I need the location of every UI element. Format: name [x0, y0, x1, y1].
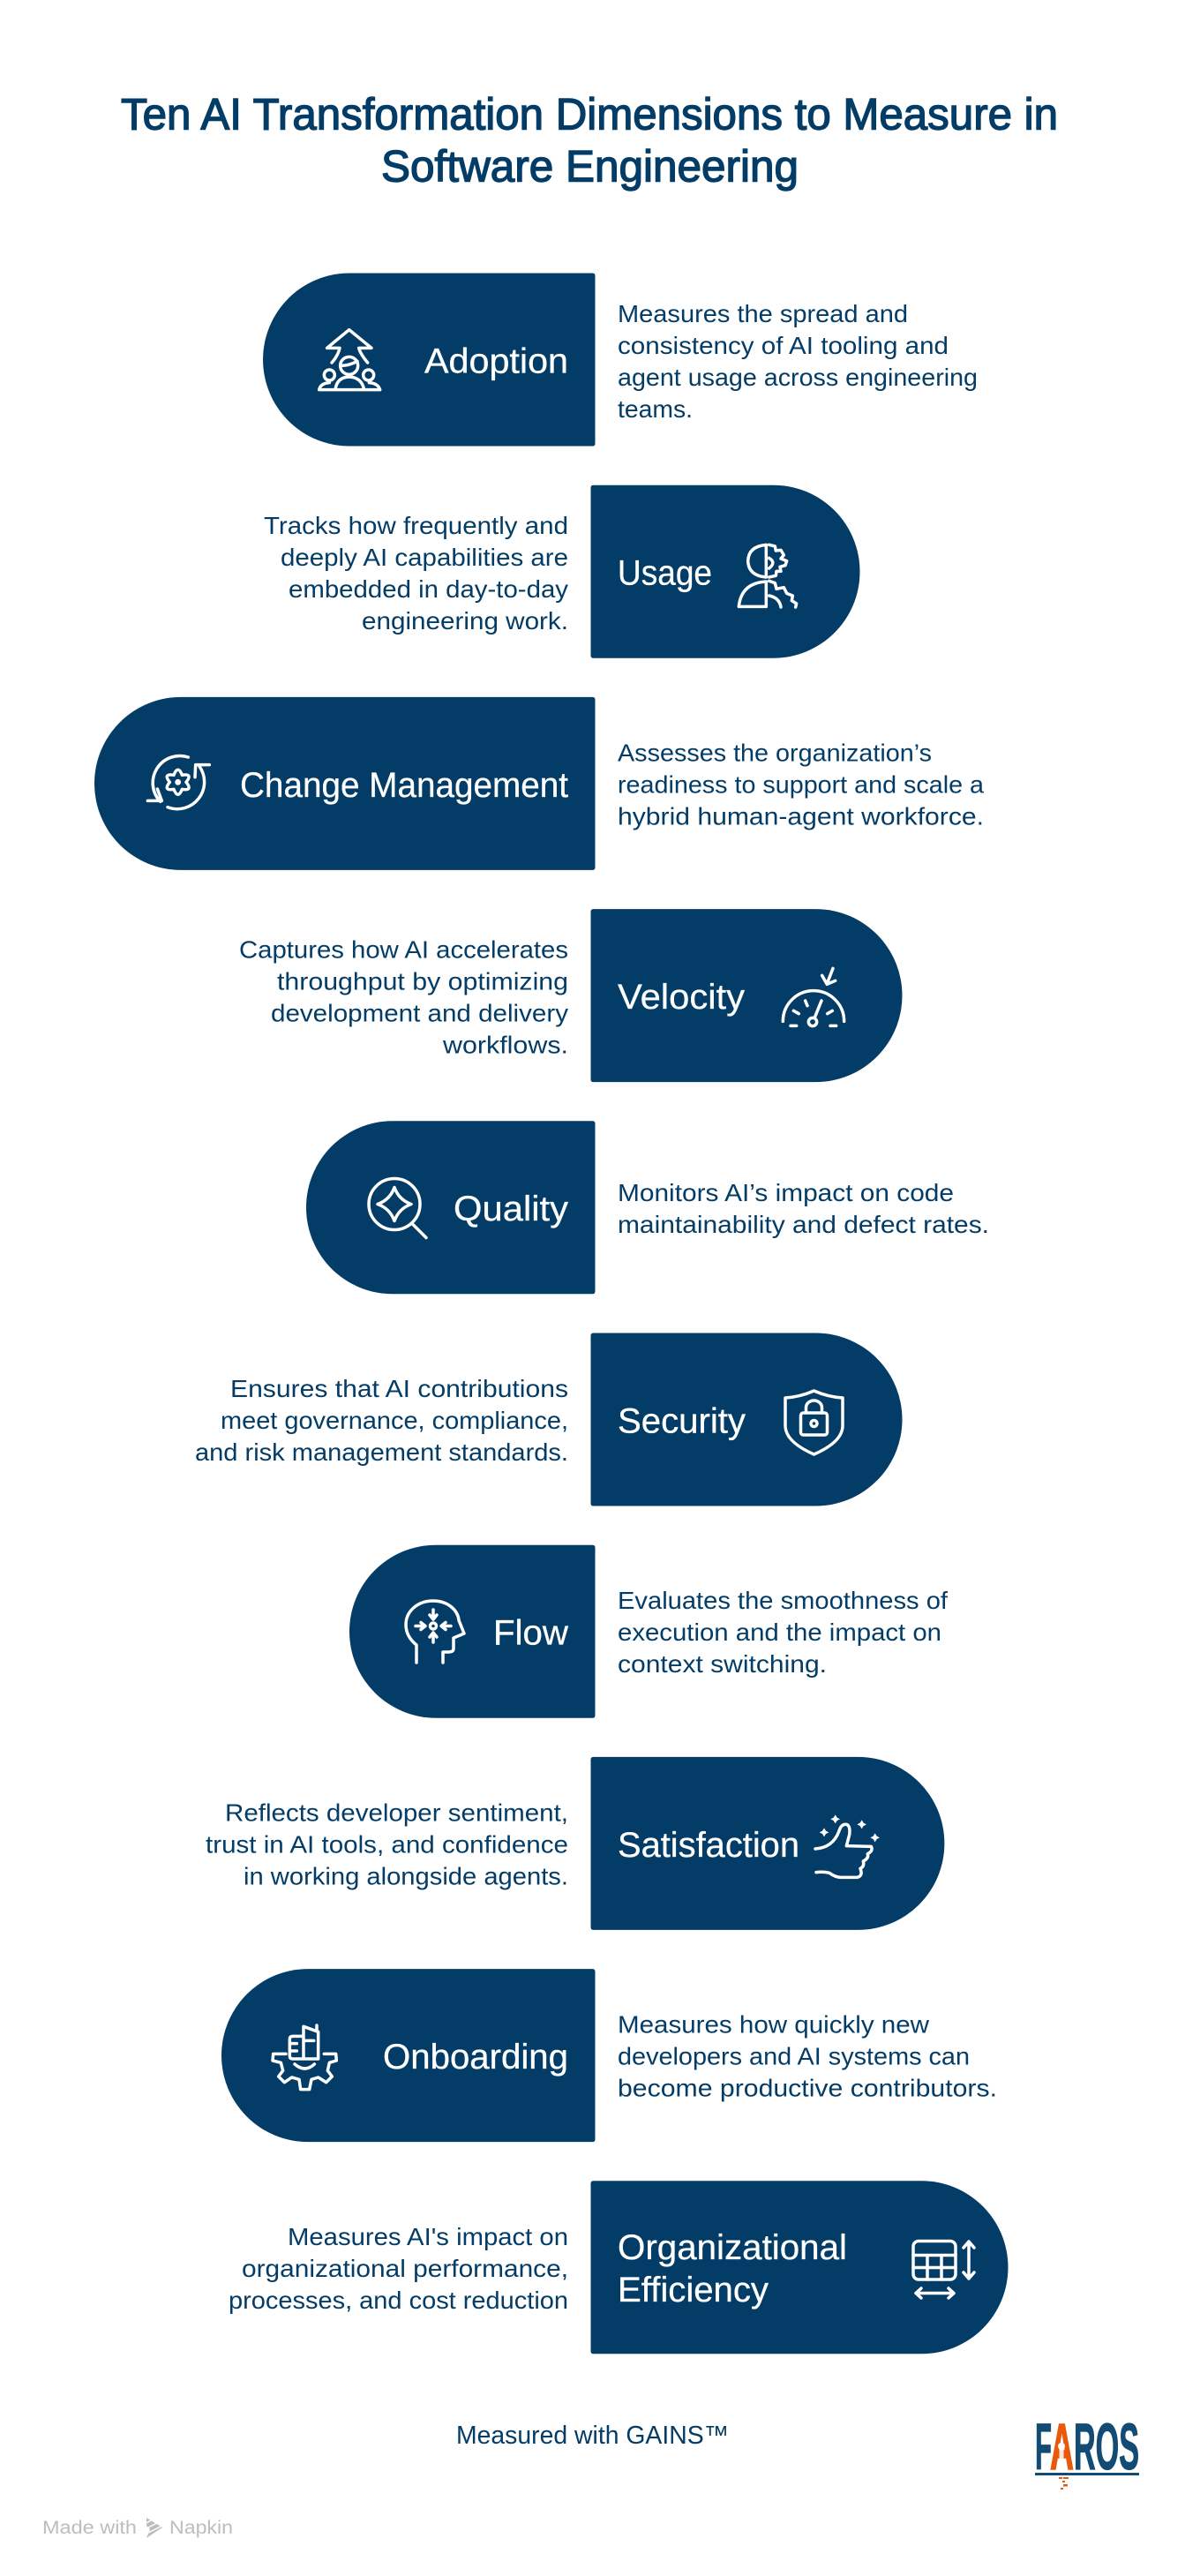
logo: Faros: F	[1035, 2410, 1052, 2483]
description: Onboarding: developers and AI systems can	[618, 2043, 970, 2070]
panel: Satisfaction pill	[591, 1757, 944, 1930]
row: Organizational Efficiency	[229, 2181, 1008, 2354]
icon: table with resize arrows	[913, 2242, 974, 2298]
watermark: Made with Napkin: Made with	[42, 2518, 137, 2538]
description: Change Management: hybrid human-agent workforce.	[618, 802, 984, 830]
icon: head with converging arrows	[406, 1601, 464, 1663]
label: Organizational Efficiency	[618, 2228, 847, 2309]
icon: thumbs up with sparkles	[815, 1814, 880, 1877]
description: Quality: Monitors AI’s impact on code	[618, 1179, 954, 1206]
logo: Faros	[1035, 2410, 1139, 2490]
description: Usage: embedded in day-to-day	[289, 575, 568, 603]
label: Organizational Efficiency: Organizational	[618, 2228, 847, 2267]
icon: shield with lock	[785, 1391, 843, 1454]
description: Security: and risk management standards.	[195, 1438, 568, 1466]
row: Change Management	[94, 697, 984, 870]
description: Velocity: workflows.	[442, 1032, 568, 1059]
description: Adoption: teams.	[618, 395, 693, 423]
description: Quality: maintainability and defect rates.	[618, 1211, 989, 1238]
description: Satisfaction: in working alongside agents.	[244, 1862, 568, 1889]
description: Adoption: agent usage across engineering	[618, 364, 978, 391]
panel: Security pill	[591, 1333, 902, 1506]
icon: book on gear	[273, 2025, 336, 2090]
description: Flow: execution and the impact on	[618, 1618, 941, 1646]
watermark: Made with Napkin	[42, 2518, 233, 2538]
footer text: Measured with GAINS: Measured with GAINS™	[456, 2422, 729, 2450]
title	[121, 90, 1058, 191]
panel: Flow pill	[349, 1545, 595, 1718]
description: Quality	[618, 1179, 989, 1238]
description: Adoption: consistency of AI tooling and	[618, 332, 949, 359]
icon: magnifier with sparkle	[369, 1179, 426, 1237]
description: Change Management	[618, 739, 984, 830]
icon: half person with gears	[739, 544, 797, 607]
description: Onboarding: Measures how quickly new	[618, 2011, 930, 2039]
description: Velocity: throughput by optimizing	[277, 968, 568, 995]
title: Software Engineering	[381, 141, 799, 191]
icon: gear with cycle arrows	[147, 755, 209, 809]
description: Usage: deeply AI capabilities are	[281, 544, 568, 571]
label: Satisfaction: Satisfaction	[618, 1826, 799, 1865]
description: Change Management: Assesses the organization’s	[618, 739, 932, 766]
icon: people with upward arrow	[319, 330, 380, 390]
label: Onboarding: Onboarding	[383, 2038, 568, 2077]
description: Onboarding	[618, 2011, 997, 2102]
description: Velocity: Captures how AI accelerates	[239, 936, 568, 964]
panel: Onboarding pill	[221, 1969, 595, 2142]
description: Security: Ensures that AI contributions	[230, 1375, 568, 1402]
label: Velocity: Velocity	[618, 978, 745, 1017]
description: Onboarding: become productive contributors.	[618, 2075, 997, 2102]
label: Adoption: Adoption	[424, 342, 568, 381]
description: Flow: Evaluates the smoothness of	[618, 1587, 948, 1614]
panel: Velocity pill	[591, 909, 902, 1082]
row: Adoption	[263, 274, 978, 447]
label: Quality: Quality	[454, 1190, 568, 1228]
row: Security	[195, 1333, 902, 1506]
row: Flow	[349, 1545, 948, 1718]
panel: Change Management pill	[94, 697, 595, 870]
description: Adoption: Measures the spread and	[618, 300, 908, 327]
description: Velocity	[239, 936, 568, 1059]
description: Usage	[264, 512, 568, 635]
description: Security: meet governance, compliance,	[221, 1407, 568, 1434]
description: Organizational Efficiency: processes, and cost reduction	[229, 2287, 568, 2314]
description: Organizational Efficiency	[229, 2223, 568, 2314]
description: Flow: context switching.	[618, 1650, 827, 1678]
description: Change Management: readiness to support and scale a	[618, 770, 984, 798]
description: Satisfaction	[206, 1799, 568, 1889]
label: Organizational Efficiency: Efficiency	[618, 2271, 769, 2309]
row: Velocity	[239, 909, 902, 1082]
row: Usage	[264, 485, 859, 658]
label: Change Management: Change Management	[240, 766, 568, 805]
icon: Napkin logo	[145, 2518, 162, 2538]
panel: Adoption pill	[263, 274, 595, 447]
description: Organizational Efficiency: organizational performance,	[242, 2255, 568, 2282]
watermark: Made with Napkin: Napkin	[169, 2518, 233, 2538]
label: Security: Security	[618, 1401, 746, 1440]
description: Usage: Tracks how frequently and	[264, 512, 568, 539]
panel: Organizational Efficiency pill	[591, 2181, 1008, 2354]
description: Velocity: development and delivery	[271, 1000, 568, 1027]
title: Ten AI Transformation Dimensions to Measure in	[121, 90, 1058, 139]
description: Organizational Efficiency: Measures AI's impact on	[288, 2223, 568, 2250]
description: Satisfaction: trust in AI tools, and confidence	[206, 1830, 568, 1858]
description: Flow	[618, 1587, 948, 1678]
panel: Usage pill	[591, 485, 859, 658]
icon: speedometer	[783, 968, 844, 1026]
description: Security	[195, 1375, 568, 1466]
logo: Faros: A	[1050, 2410, 1074, 2483]
row: Onboarding	[221, 1969, 997, 2142]
row: Quality	[306, 1121, 989, 1294]
panel: Quality pill	[306, 1121, 595, 1294]
description: Adoption	[618, 300, 978, 423]
label: Usage: Usage	[618, 554, 712, 593]
row: Satisfaction	[206, 1757, 944, 1930]
description: Satisfaction: Reflects developer sentiment,	[225, 1799, 568, 1826]
description: Usage: engineering work.	[362, 607, 568, 635]
label: Flow: Flow	[493, 1614, 568, 1653]
